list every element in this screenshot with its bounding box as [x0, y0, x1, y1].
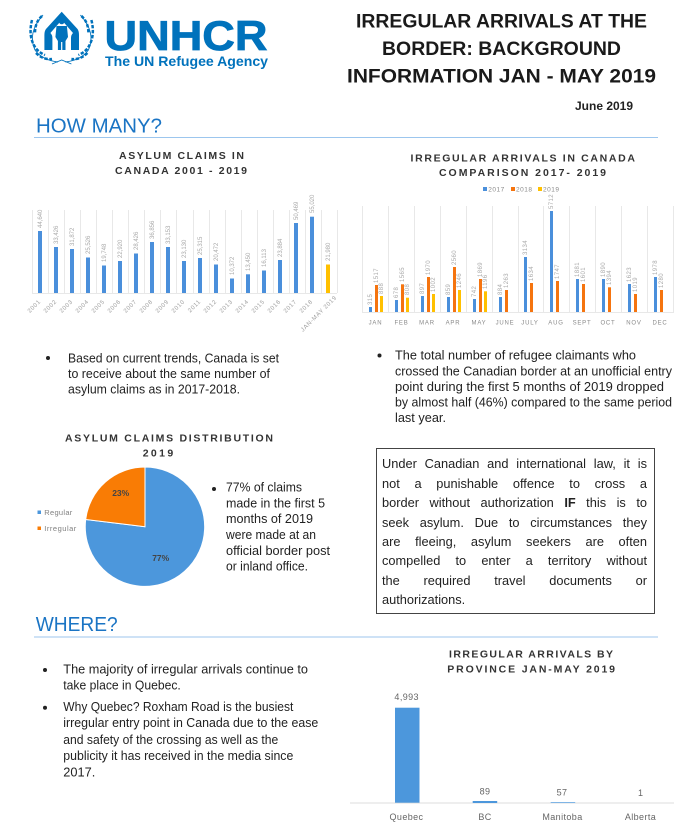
callout: legal note box — [376, 448, 655, 614]
bar chart: monthly irregular arrivals: 897 — [420, 283, 426, 294]
bar chart: monthly irregular arrivals: JAN — [369, 320, 382, 326]
text: pie bullet: months of 2019 — [226, 511, 313, 526]
bar chart: monthly irregular arrivals: 884 — [498, 284, 504, 295]
bar chart: asylum claims 2001-2019: 2009 — [155, 299, 170, 315]
text: pie bullet — [212, 480, 330, 573]
bar chart: asylum claims 2001-2019: JAN-MAY 2019 — [300, 295, 338, 333]
bar chart: monthly irregular arrivals: 2560 — [452, 250, 458, 265]
callout: legal note box: compelled to enter a territory without — [382, 553, 647, 568]
text: pie bullet: made in the first 5 — [226, 495, 325, 510]
bar chart: by province: 89 — [480, 786, 490, 796]
bar chart: asylum claims 2001-2019: 25,526 — [86, 235, 92, 254]
bar chart: asylum claims 2001-2019: 21,980 — [326, 242, 332, 261]
bar chart: monthly irregular arrivals: 808 — [405, 284, 411, 295]
bar chart: asylum claims 2001-2019 — [27, 194, 338, 333]
text: where bullets — [43, 662, 318, 780]
bar chart: asylum claims 2001-2019: 2001 — [27, 299, 42, 315]
text: total claimants bullet: crossed the Canadian border at an unofficial entry — [395, 364, 673, 378]
legend: years — [483, 186, 559, 194]
bar chart: monthly irregular arrivals: OCT — [600, 320, 616, 326]
bar chart: monthly irregular arrivals: SEPT — [573, 320, 591, 326]
bar chart: asylum claims 2001-2019: 23,130 — [182, 239, 188, 258]
bar chart: asylum claims 2001-2019: 2002 — [43, 299, 58, 315]
bar chart: monthly irregular arrivals: JUNE — [496, 320, 514, 326]
bar chart: asylum claims 2001-2019: 13,450 — [246, 252, 252, 271]
legend: years: 2018 — [516, 186, 532, 194]
heading: how many: HOW MANY? — [36, 116, 162, 138]
bar chart: monthly irregular arrivals: 1246 — [457, 273, 463, 288]
bar chart: monthly irregular arrivals: FEB — [394, 320, 409, 326]
bar chart: monthly irregular arrivals: AUG — [548, 320, 564, 326]
bar chart: by province: Quebec — [390, 812, 424, 822]
bar chart: by province: BC — [478, 812, 492, 822]
chart title: irregular arrivals comparison — [410, 153, 635, 179]
bar chart: asylum claims 2001-2019: 2018 — [299, 299, 314, 315]
bar chart: monthly irregular arrivals: 1634 — [529, 266, 535, 281]
bar chart: asylum claims 2001-2019: 2012 — [203, 299, 218, 315]
bar chart: asylum claims 2001-2019: 33,153 — [166, 225, 172, 244]
bar chart: monthly irregular arrivals: 1601 — [581, 267, 587, 282]
text: where bullets: The majority of irregular arrivals continue to — [63, 662, 308, 676]
bar chart: asylum claims 2001-2019: 2007 — [123, 299, 138, 315]
title: BORDER: BACKGROUND — [382, 39, 621, 60]
bar chart: asylum claims 2001-2019: 2011 — [187, 299, 202, 314]
bar chart: by province — [350, 692, 674, 822]
bar chart: monthly irregular arrivals: 1280 — [659, 273, 665, 288]
bar chart: asylum claims 2001-2019: 2017 — [283, 299, 298, 315]
bar chart: monthly irregular arrivals: 1890 — [601, 262, 607, 277]
bar chart: monthly irregular arrivals: 1196 — [483, 274, 489, 289]
chart title: distribution — [65, 433, 273, 460]
bar chart: asylum claims 2001-2019: 36,856 — [150, 220, 156, 239]
bar chart: asylum claims 2001-2019: 2013 — [219, 299, 234, 315]
text: claims bullet: Based on current trends, Canada is set — [68, 350, 279, 365]
bar chart: asylum claims 2001-2019: 28,426 — [134, 231, 140, 250]
bar chart: asylum claims 2001-2019: 25,315 — [198, 236, 204, 255]
pie chart: regular vs irregular: 23% — [112, 488, 130, 498]
bar chart: asylum claims 2001-2019: 50,469 — [294, 201, 300, 220]
bar chart: monthly irregular arrivals: 1978 — [653, 260, 659, 275]
legend: pie: Regular — [44, 508, 73, 517]
bar chart: monthly irregular arrivals: 1869 — [478, 262, 484, 277]
text: where bullets: take place in Quebec. — [63, 677, 181, 692]
bar chart: by province: Manitoba — [542, 812, 583, 822]
bar chart: asylum claims 2001-2019: 10,372 — [230, 256, 236, 275]
text: claims bullet: asylum claims as in 2017-2018. — [68, 382, 240, 396]
bar chart: monthly irregular arrivals: 1002 — [431, 277, 437, 292]
text: total claimants bullet: point during the first 5 months of 2019 dropped — [395, 379, 664, 394]
pie chart: regular vs irregular — [85, 467, 205, 586]
bar chart: monthly irregular arrivals: APR — [446, 320, 460, 326]
bar chart: monthly irregular arrivals: JULY — [521, 320, 539, 326]
callout: legal note box: Under Canadian and international law, it is — [382, 456, 647, 470]
bar chart: asylum claims 2001-2019: 20,472 — [214, 242, 220, 261]
text: where bullets: irregular entry point in Canada due to the ease — [63, 715, 318, 730]
text: total claimants bullet: The total number of refugee claimants who — [395, 348, 636, 362]
bar chart: asylum claims 2001-2019: 44,640 — [38, 209, 44, 228]
text: pie bullet: or inland office. — [226, 558, 308, 573]
chart title: irregular arrivals comparison: COMPARISON 2017- 2019 — [439, 167, 606, 179]
pie chart: regular vs irregular: 77% — [152, 553, 170, 563]
bar chart: monthly irregular arrivals: 1970 — [426, 260, 432, 275]
bar chart: monthly irregular arrivals: 859 — [446, 284, 452, 295]
text: claims bullet — [46, 350, 279, 396]
icon: laurel emblem — [31, 12, 93, 64]
bar chart: by province: Alberta — [625, 812, 656, 822]
text: where bullets: Why Quebec? Roxham Road is the busiest — [63, 699, 294, 714]
chart title: asylum claims — [115, 150, 247, 177]
chart title: distribution: ASYLUM CLAIMS DISTRIBUTION — [65, 433, 273, 445]
heading: where: WHERE? — [36, 614, 118, 636]
text: total claimants bullet: by almost half (46%) compared to the same period — [395, 394, 672, 410]
bar chart: monthly irregular arrivals: 1747 — [555, 264, 561, 279]
bar chart: asylum claims 2001-2019: 2014 — [235, 299, 250, 315]
bar chart: monthly irregular arrivals: 315 — [368, 294, 374, 305]
text: where bullets: and safety of the crossing as well as the — [63, 732, 278, 747]
bar chart: asylum claims 2001-2019: 22,920 — [118, 239, 124, 258]
bar chart: monthly irregular arrivals: NOV — [626, 320, 642, 326]
bar chart: asylum claims 2001-2019: 2015 — [251, 299, 266, 315]
chart title: asylum claims: CANADA 2001 - 2019 — [115, 165, 247, 177]
chart title: by province: IRREGULAR ARRIVALS BY — [449, 649, 613, 661]
title: INFORMATION JAN - MAY 2019 — [347, 66, 656, 87]
bar chart: monthly irregular arrivals: DEC — [652, 320, 668, 326]
callout: legal note box: not a punishable offence to cross a — [382, 476, 647, 490]
bar chart: monthly irregular arrivals — [362, 194, 674, 326]
text: total claimants bullet — [378, 348, 673, 425]
bar chart: monthly irregular arrivals: MAY — [472, 320, 486, 326]
chart title: distribution: 2019 — [143, 448, 173, 460]
text: pie bullet: official border post — [226, 543, 330, 558]
callout: legal note box: border without authorization IF this is to — [382, 495, 647, 510]
bar chart: asylum claims 2001-2019: 55,020 — [310, 194, 316, 213]
legend: years: 2017 — [488, 186, 505, 194]
bar chart: asylum claims 2001-2019: 2006 — [107, 299, 122, 315]
bar chart: monthly irregular arrivals: MAR — [419, 320, 435, 326]
bar chart: monthly irregular arrivals: 1517 — [374, 268, 380, 283]
callout: legal note box: are fleeing, asylum seekers are often — [382, 534, 647, 549]
bar chart: asylum claims 2001-2019: 2010 — [171, 299, 186, 315]
legend: pie: Irregular — [44, 524, 77, 533]
bar chart: asylum claims 2001-2019: 2003 — [59, 299, 74, 315]
bar chart: asylum claims 2001-2019: 2005 — [91, 299, 106, 315]
text: total claimants bullet: last year. — [395, 410, 446, 425]
bar chart: asylum claims 2001-2019: 31,872 — [70, 227, 76, 246]
bar chart: monthly irregular arrivals: 1565 — [400, 267, 406, 282]
chart title: by province: PROVINCE JAN-MAY 2019 — [447, 663, 615, 675]
callout: legal note box: authorizations. — [382, 592, 465, 606]
logo: UNHCR — [31, 12, 268, 69]
bar chart: asylum claims 2001-2019: 23,884 — [278, 238, 284, 257]
title — [347, 12, 656, 87]
bar chart: asylum claims 2001-2019: 16,113 — [262, 248, 268, 267]
bar chart: monthly irregular arrivals: 1623 — [627, 267, 633, 282]
bar chart: asylum claims 2001-2019: 33,426 — [54, 225, 60, 244]
logo wordmark: UNHCR — [104, 12, 268, 59]
chart title: irregular arrivals comparison: IRREGULAR ARRIVALS IN CANADA — [410, 153, 635, 165]
bar chart: asylum claims 2001-2019: 2016 — [267, 299, 282, 315]
bar chart: monthly irregular arrivals: 1019 — [633, 277, 639, 292]
chart title: asylum claims: ASYLUM CLAIMS IN — [119, 150, 244, 162]
date: June 2019 — [575, 101, 633, 113]
chart title: by province — [447, 649, 615, 675]
bar chart: by province: 57 — [557, 787, 567, 797]
bar chart: monthly irregular arrivals: 678 — [394, 287, 400, 298]
text: pie bullet: 77% of claims — [226, 480, 302, 495]
bar chart: by province: 4,993 — [394, 692, 419, 702]
bar chart: monthly irregular arrivals: 1394 — [607, 270, 613, 285]
bar chart: monthly irregular arrivals: 5712 — [549, 194, 555, 209]
bar chart: monthly irregular arrivals: 3134 — [523, 240, 529, 255]
bar chart: asylum claims 2001-2019: 19,748 — [102, 243, 108, 262]
legend: years: 2019 — [543, 186, 559, 194]
legend: pie — [38, 508, 77, 533]
logo tagline: The UN Refugee Agency — [105, 54, 268, 69]
bar chart: monthly irregular arrivals: 888 — [379, 283, 385, 294]
bar chart: monthly irregular arrivals: 742 — [472, 286, 478, 297]
bar chart: monthly irregular arrivals: 1881 — [575, 262, 581, 277]
bar chart: monthly irregular arrivals: 1263 — [504, 273, 510, 288]
bar chart: by province: 1 — [638, 788, 643, 798]
bar chart: asylum claims 2001-2019: 2008 — [139, 299, 154, 315]
text: pie bullet: were made at an — [225, 527, 316, 542]
text: claims bullet: to receive about the same number of — [68, 366, 270, 381]
callout: legal note box: seek asylum. Due to circumstances they — [382, 514, 647, 530]
text: where bullets: 2017. — [63, 765, 95, 780]
title: IRREGULAR ARRIVALS AT THE — [356, 12, 647, 32]
text: where bullets: publicity it has received in the media since — [63, 748, 293, 763]
bar chart: asylum claims 2001-2019: 2004 — [75, 299, 90, 315]
callout: legal note box: the required travel documents or — [382, 573, 647, 588]
